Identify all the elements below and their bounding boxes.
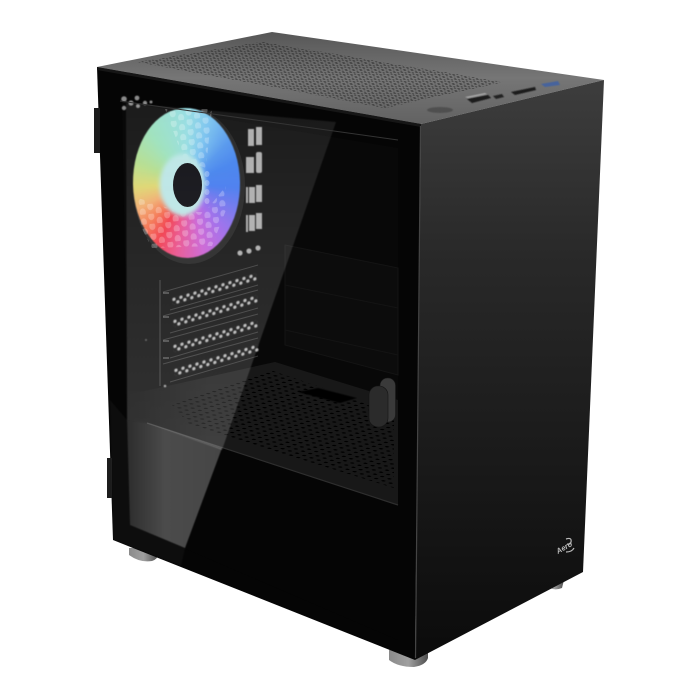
- case interior: [147, 244, 398, 506]
- fan holes lower: [138, 186, 226, 248]
- fan details: [138, 109, 226, 248]
- glass thumb screw handle: [369, 378, 396, 427]
- fan hub: [173, 163, 202, 207]
- side panel: [415, 80, 604, 660]
- fan holes upper: [165, 109, 212, 168]
- glass reflection: [110, 103, 336, 566]
- fan holes column: [204, 171, 210, 204]
- brand logo: Aero: [554, 539, 574, 556]
- floor mesh: [174, 362, 398, 504]
- rear IO cutouts: [237, 127, 262, 256]
- front panel frame: [120, 101, 420, 658]
- expansion slot rails: [160, 265, 258, 386]
- top left vent: [121, 96, 152, 110]
- expansion slots: [145, 273, 259, 387]
- PC case illustration: [94, 32, 604, 667]
- top IO ports: [427, 81, 560, 113]
- foot: left rear: [129, 548, 158, 561]
- top vent mesh: [138, 42, 503, 108]
- fan frame: [133, 108, 245, 264]
- top panel: [97, 32, 604, 124]
- foot: front: [389, 650, 428, 667]
- drive bays: [285, 245, 398, 375]
- hinge top: [94, 108, 100, 153]
- hinge bottom: [107, 458, 112, 498]
- PSU shroud: [170, 432, 364, 495]
- fan hub ring: [160, 154, 206, 216]
- glass front panel: [97, 67, 421, 660]
- foot: right rear: [544, 580, 564, 589]
